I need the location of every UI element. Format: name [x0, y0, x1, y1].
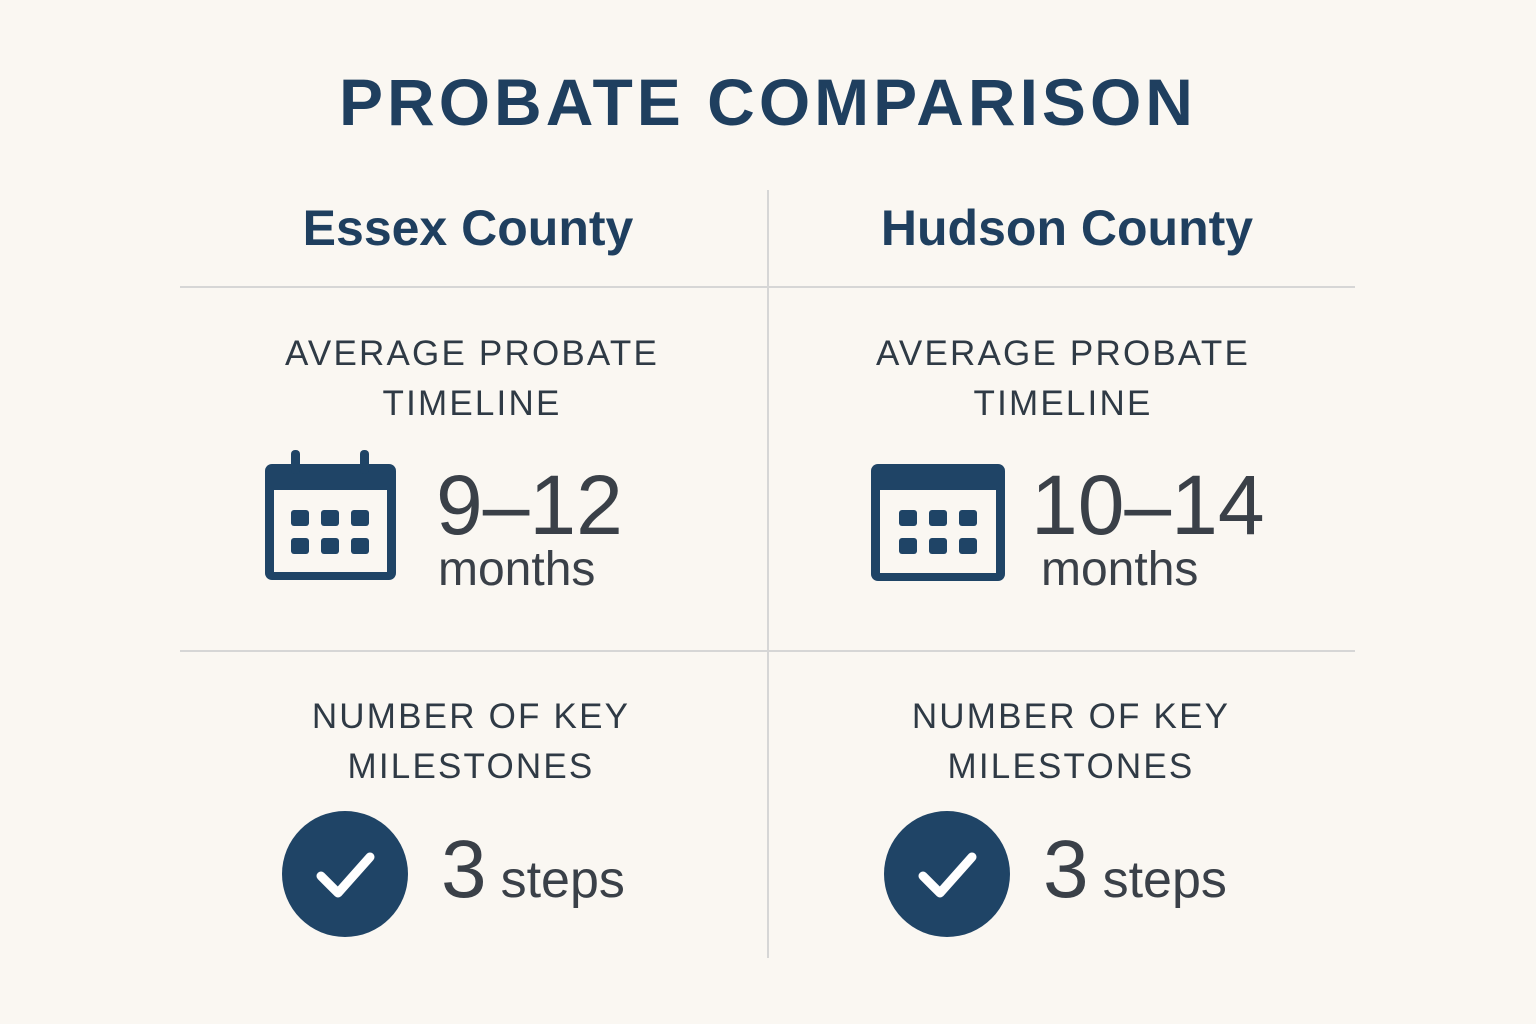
- icon: calendar Essex: [265, 450, 396, 580]
- label: Hudson average timeline: [876, 334, 1250, 423]
- title: PROBATE COMPARISON: [339, 65, 1197, 139]
- label: Hudson milestones: MILESTONES: [948, 747, 1194, 786]
- stat: Hudson 3 steps: 3 steps: [1043, 824, 1227, 915]
- label: Essex average timeline: [285, 334, 659, 423]
- label: Essex average timeline: TIMELINE: [382, 384, 562, 423]
- icon: calendar Hudson: [871, 464, 1005, 581]
- icon: check circle Essex: [282, 811, 408, 937]
- label: Hudson milestones: [912, 697, 1230, 786]
- label: Essex milestones: MILESTONES: [348, 747, 594, 786]
- stat: 10-14 months: months: [1041, 543, 1198, 596]
- heading: Hudson County: Hudson County: [881, 200, 1253, 256]
- label: Hudson milestones: NUMBER OF KEY: [912, 697, 1230, 736]
- icon: check circle Hudson: [884, 811, 1010, 937]
- label: Essex average timeline: AVERAGE PROBATE: [285, 334, 659, 373]
- label: Essex milestones: NUMBER OF KEY: [312, 697, 630, 736]
- label: Essex milestones: [312, 697, 630, 786]
- label: Hudson average timeline: AVERAGE PROBATE: [876, 334, 1250, 373]
- stat: 9-12 months: months: [438, 543, 595, 596]
- label: Hudson average timeline: TIMELINE: [973, 384, 1152, 423]
- stat: Essex 3 steps: 3 steps: [441, 824, 625, 915]
- stat: 10-14 months: 10–14: [1031, 458, 1265, 552]
- heading: Essex County: Essex County: [303, 200, 633, 256]
- stat: 9-12 months: [436, 458, 623, 596]
- stat: 10-14 months: [1031, 458, 1265, 596]
- stat: 9-12 months: 9–12: [436, 458, 623, 552]
